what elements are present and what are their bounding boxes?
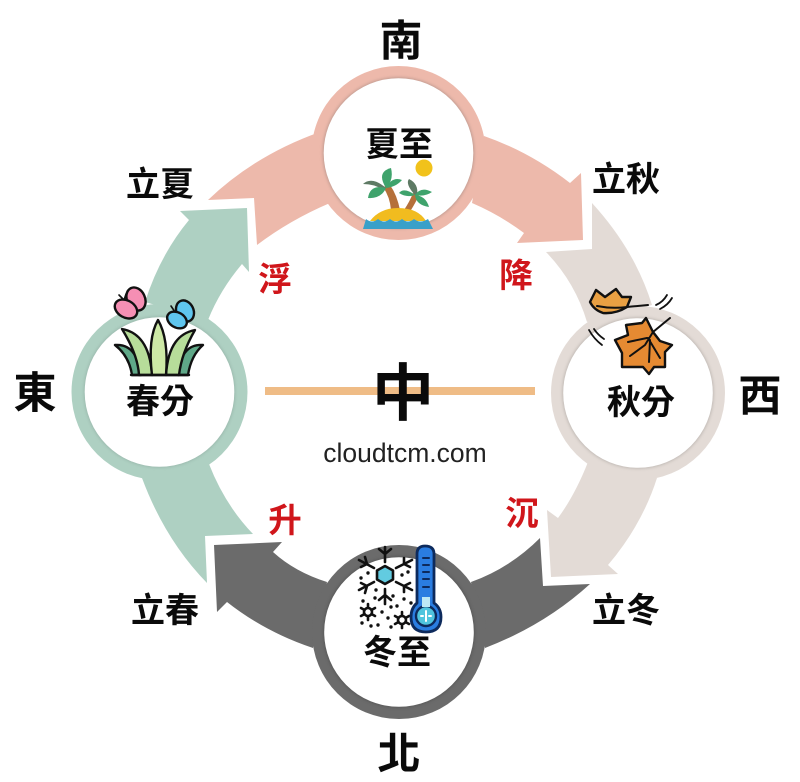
qi movement: descend: 降 [499, 258, 533, 295]
node: winter solstice [312, 545, 486, 719]
grass [115, 320, 203, 375]
icon: palm island [363, 160, 433, 229]
qi movement: rise: 升 [268, 503, 302, 540]
arrow: autumn beige upper segment [546, 203, 652, 322]
label: spring equinox: 春分 [126, 383, 194, 421]
snow dots [359, 570, 413, 629]
node: spring equinox [72, 304, 248, 480]
solar term: start of autumn: 立秋 [592, 161, 660, 199]
arrow: winter gray left segment [214, 542, 327, 648]
node: summer solstice [312, 66, 486, 240]
arrow: spring green upper segment [145, 208, 249, 320]
thermometer [411, 546, 441, 632]
label: winter solstice: 冬至 [363, 634, 431, 672]
icon: butterflies and grass [111, 284, 203, 375]
solar term: start of spring: 立春 [131, 592, 199, 630]
qi movement: float: 浮 [258, 262, 292, 299]
arrow: summer pink left segment [208, 132, 330, 245]
blue butterfly [164, 297, 197, 332]
direction: east: 東 [14, 370, 56, 418]
icon: snowflake and thermometer [359, 546, 441, 632]
pink butterfly [111, 284, 149, 322]
arrow: summer pink right segment [472, 136, 583, 243]
solar term: start of summer: 立夏 [126, 166, 194, 204]
center bar [265, 387, 535, 395]
label: summer solstice: 夏至 [365, 126, 433, 164]
arrow: winter gray right segment [471, 538, 590, 648]
label: autumn equinox: 秋分 [607, 384, 675, 422]
center character: 中 [372, 360, 434, 429]
website label: cloudtcm.com [323, 438, 487, 468]
direction: west: 西 [738, 373, 782, 421]
direction: north: 北 [378, 731, 420, 779]
snowflake [359, 547, 412, 628]
arrow: spring green lower segment [142, 464, 253, 583]
arrow: autumn beige lower segment [547, 462, 657, 577]
qi movement: sink: 沉 [505, 496, 539, 533]
direction: south: 南 [380, 18, 422, 66]
solar term: start of winter: 立冬 [592, 592, 660, 630]
icon: autumn leaves [589, 289, 672, 374]
node: autumn equinox [551, 306, 725, 480]
